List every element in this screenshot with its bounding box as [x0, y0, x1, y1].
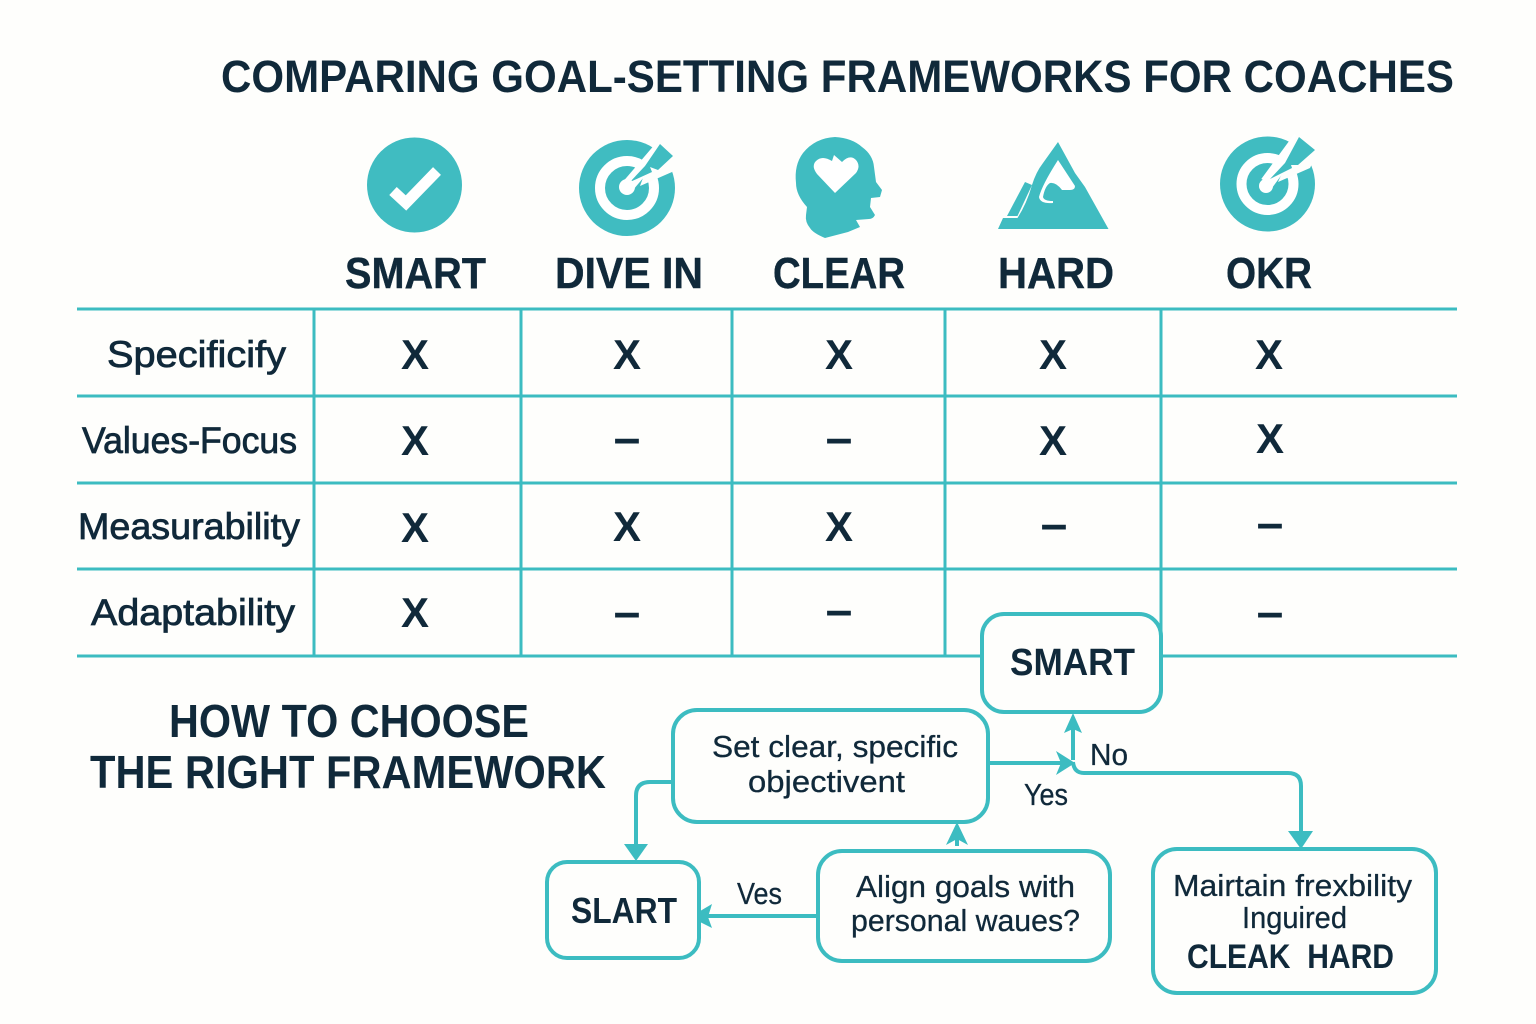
flow box: set objective: objectivent: [748, 764, 905, 799]
row marks: Values-Focus: X: [1256, 415, 1284, 462]
icon: HARD mountain: [998, 142, 1108, 229]
icon: SMART check mark: [367, 138, 462, 232]
column headers: SMART: [345, 249, 486, 298]
row marks: Measurability: [401, 497, 1283, 551]
comparison table: [77, 309, 1457, 656]
title: COMPARING GOAL-SETTING FRAMEWORKS FOR COACHES: [221, 51, 1454, 102]
flow arrow: set objective to junction: [988, 751, 1075, 775]
row marks: Adaptability: [401, 584, 1283, 639]
flow box: maintain flexibility: Inguired: [1242, 900, 1347, 935]
flow arrow: no to flexibility: [1073, 762, 1313, 849]
icon: CLEAR head with heart: [796, 137, 882, 238]
column headers: OKR: [1226, 249, 1312, 298]
flow arrow: align to SLART: [690, 904, 818, 928]
row marks: Measurability: –: [1257, 497, 1283, 550]
row labels: Specificify: [107, 334, 287, 375]
row labels: Adaptability: [91, 592, 296, 633]
row marks: Specificity: X: [401, 331, 429, 378]
icon: DIVE IN target: [579, 136, 680, 236]
row marks: Specificity: X: [1039, 331, 1067, 378]
flow box: SMART: SMART: [1010, 642, 1135, 684]
row marks: Values-Focus: –: [826, 412, 852, 465]
row marks: Specificity: X: [613, 331, 641, 378]
row labels: [78, 334, 300, 633]
flow box: SMART: [982, 614, 1161, 712]
flow box: set objective: [673, 710, 988, 822]
flow label: ves: Ves: [737, 876, 782, 911]
flow box: maintain flexibility: [1153, 849, 1436, 993]
row labels: Values-Focus: [82, 420, 297, 461]
row marks: Specificity: X: [1255, 331, 1283, 378]
flow box: SLART: SLART: [571, 890, 677, 931]
flow box: SLART: [547, 862, 699, 958]
flow label: yes: Yes: [1024, 777, 1068, 812]
row marks: Adaptability: –: [1257, 586, 1283, 639]
flow box: align goals: [818, 851, 1110, 961]
row marks: Adaptability: –: [826, 584, 852, 637]
row marks: Specificity: X: [825, 331, 853, 378]
flow arrow: align up to set objective: [946, 822, 968, 846]
row marks: Values-Focus: [401, 412, 1284, 465]
row marks: Measurability: X: [613, 503, 641, 550]
section heading: how to choose: [90, 695, 606, 798]
section heading: how to choose: HOW TO CHOOSE: [169, 695, 529, 747]
column headers: DIVE IN: [555, 249, 703, 298]
flow box: maintain flexibility: CLEAK HARD: [1187, 938, 1394, 976]
icon: OKR target: [1220, 130, 1320, 232]
flow arrow: up to SMART: [1064, 713, 1082, 760]
column headers: [345, 249, 1312, 298]
row marks: Measurability: X: [401, 504, 429, 551]
row marks: Adaptability: X: [401, 589, 429, 636]
flow box: maintain flexibility: Mairtain frexbility: [1173, 868, 1413, 903]
row marks: Specificity: [401, 331, 1283, 378]
row marks: Measurability: –: [1041, 498, 1067, 551]
row marks: Values-Focus: X: [401, 417, 429, 464]
row marks: Values-Focus: X: [1039, 417, 1067, 464]
column headers: HARD: [998, 249, 1114, 298]
row marks: Adaptability: –: [614, 586, 640, 639]
flow arrow: set objective to SLART: [624, 782, 672, 861]
section heading: how to choose: THE RIGHT FRAMEWORK: [90, 746, 606, 798]
row labels: Measurability: [78, 506, 300, 547]
row marks: Values-Focus: –: [614, 412, 640, 465]
flow box: align goals: Align goals with: [856, 869, 1075, 904]
row marks: Measurability: X: [825, 503, 853, 550]
flow box: align goals: personal waues?: [851, 903, 1080, 938]
flow label: no: No: [1090, 737, 1128, 772]
flow box: set objective: Set clear, specific: [712, 729, 958, 764]
column headers: CLEAR: [773, 249, 905, 298]
